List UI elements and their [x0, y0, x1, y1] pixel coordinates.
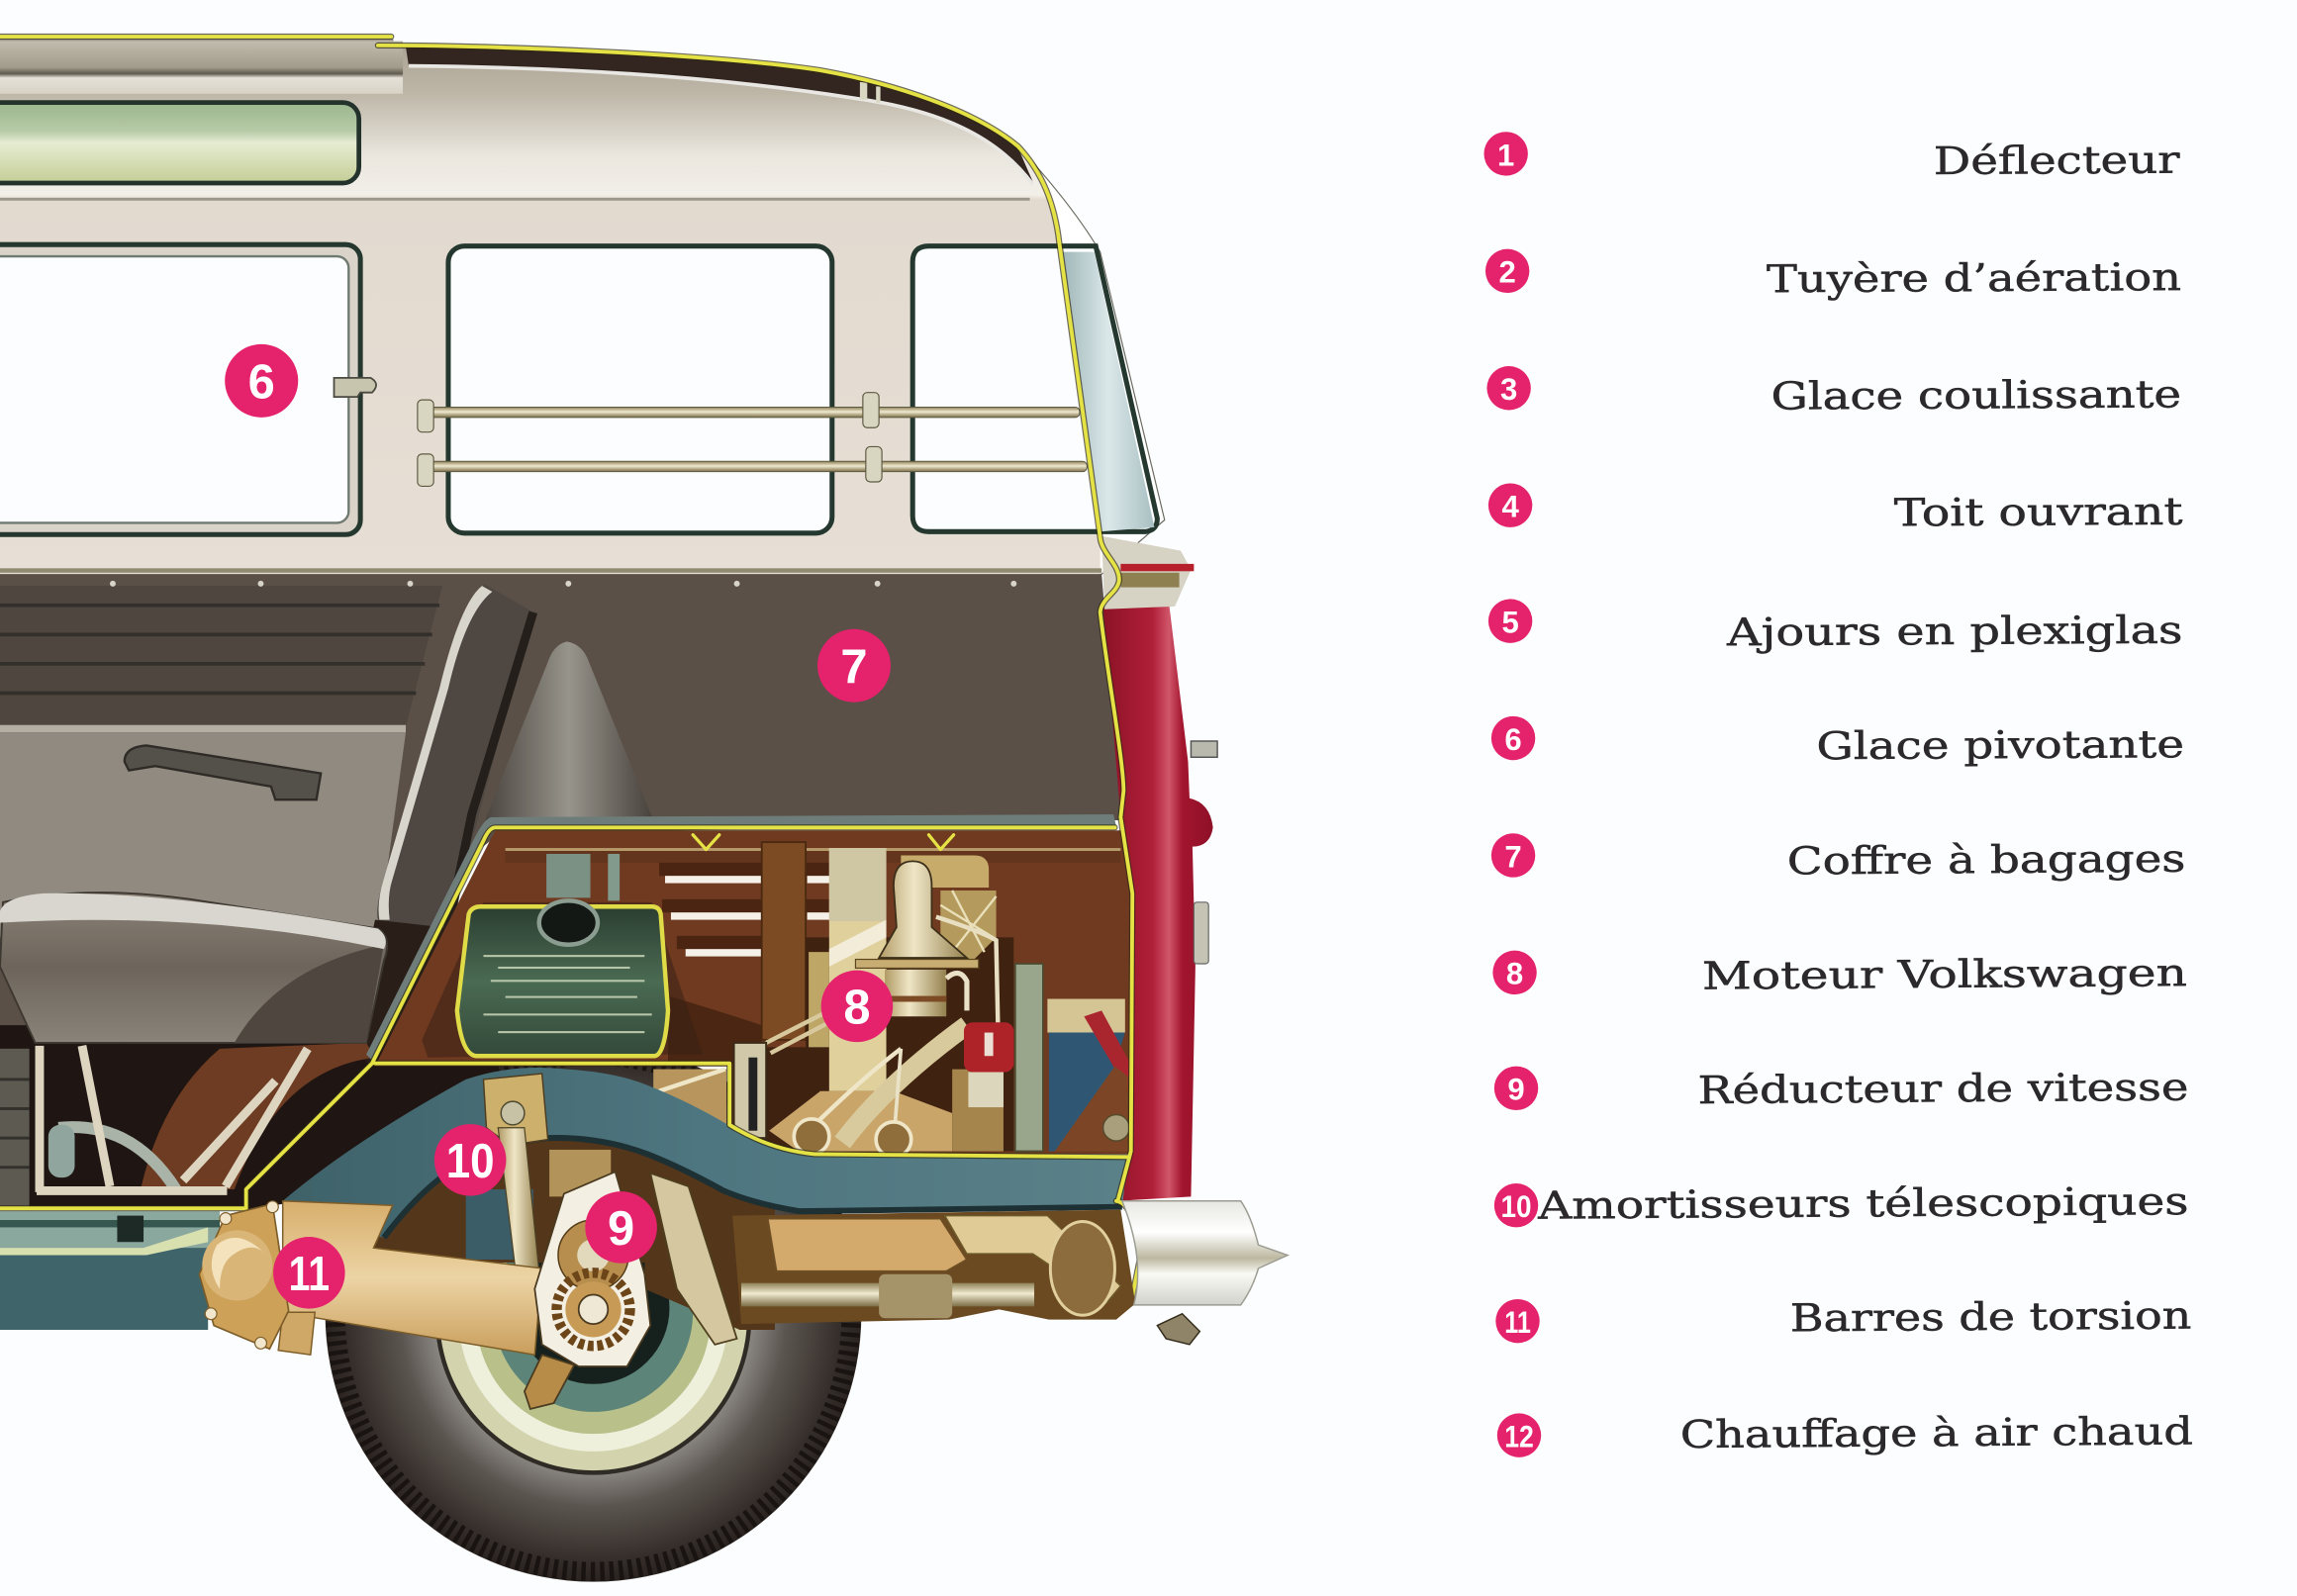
legend item 9 [1494, 1066, 2189, 1113]
legend item 5: Ajours en plexiglas [1726, 609, 2183, 655]
chassis frame, blue-green [0, 1068, 1128, 1330]
legend item 2: Tuyère d’aération [1767, 255, 2181, 302]
legend item 1: 1 [1497, 138, 1514, 172]
tank shadow [668, 996, 762, 1064]
legend item 6: Glace pivotante [1816, 722, 2184, 769]
left sill [0, 1247, 208, 1330]
legend item 5 [1488, 599, 2183, 655]
legend item 6 [1491, 716, 2184, 769]
battery block [1047, 999, 1129, 1151]
front side window [912, 246, 1157, 531]
legend item 9: 9 [1507, 1073, 1525, 1107]
fuel tank filler pipe [546, 854, 591, 897]
badge 7: 7 [840, 641, 868, 695]
legend item 7: 7 [1504, 839, 1522, 874]
rear axle, gearbox and exhaust [650, 1174, 1135, 1345]
ignition coil [964, 1022, 1013, 1107]
skylight [0, 103, 359, 183]
legend item 10: 10 [1500, 1189, 1532, 1224]
legend item 3: Glace coulissante [1771, 373, 2181, 420]
heater pipe [58, 1127, 176, 1189]
dark engine bay [740, 937, 1013, 1151]
wind screen wedge [1062, 252, 1154, 531]
legend item 5: 5 [1501, 605, 1519, 639]
legend item 11: 11 [1504, 1305, 1531, 1340]
reduction gears [525, 1172, 650, 1409]
legend item 7 [1491, 833, 2186, 885]
engine compartment [366, 814, 1132, 1157]
badge 8: 8 [843, 982, 871, 1035]
legend item 12 [1497, 1410, 2193, 1457]
badge 7 [817, 629, 891, 703]
roof dark strip [406, 47, 1033, 182]
legend item 8: Moteur Volkswagen [1702, 951, 2187, 999]
red front panel [1103, 604, 1213, 1201]
badge 10: 10 [446, 1135, 495, 1188]
legend item 3: 3 [1500, 372, 1517, 407]
legend item 12: 12 [1504, 1419, 1534, 1454]
legend item 12: Chauffage à air chaud [1680, 1410, 2193, 1457]
oil pan [768, 1219, 967, 1271]
coil spring block [549, 1150, 611, 1196]
seat legs [37, 1046, 308, 1192]
door handle [125, 745, 321, 799]
brown fender [141, 1043, 375, 1189]
rivets [110, 581, 1016, 587]
brown column [762, 842, 806, 1040]
legend item 9: Réducteur de vitesse [1697, 1066, 2189, 1113]
pivoting window [0, 244, 360, 534]
torsion end cap [199, 1201, 289, 1349]
door trim [0, 725, 406, 732]
damper tube [498, 1128, 539, 1271]
badge 11: 11 [289, 1248, 330, 1301]
legend item 1: Déflecteur [1934, 139, 2180, 184]
torsion bar arm [199, 1201, 542, 1355]
ribbed door panel [0, 586, 442, 726]
protection bars [418, 393, 1087, 486]
window latch [334, 378, 376, 397]
seat back [377, 585, 533, 931]
front seat [0, 892, 387, 1043]
legend item 8 [1492, 951, 2187, 999]
legend list [1483, 132, 2193, 1457]
legend item 3 [1486, 366, 2181, 420]
engine block and lines [653, 1010, 1004, 1157]
roof crease [0, 198, 1030, 201]
legend item 4: 4 [1501, 490, 1519, 524]
air slats [659, 863, 830, 957]
engine fan housing [809, 848, 887, 1091]
legend item 1 [1483, 132, 2180, 184]
badge 8 [821, 971, 893, 1042]
front bumper [1122, 1201, 1288, 1345]
middle sliding window [448, 246, 832, 533]
pulley and belt [1015, 964, 1043, 1151]
legend item 8: 8 [1506, 957, 1523, 991]
legend item 6: 6 [1504, 722, 1522, 757]
shock absorber and torsion housing [466, 1074, 611, 1271]
fuel tank [422, 900, 704, 1058]
yellow cut-away line [0, 37, 1140, 1303]
legend item 4: Toit ouvrant [1894, 490, 2183, 535]
gear housing wall [483, 1074, 548, 1146]
undercarriage backing [366, 1133, 775, 1330]
legend item 4 [1488, 483, 2183, 535]
roof rack strip [0, 41, 403, 94]
floor and wheel arch [0, 920, 498, 1210]
badge 9: 9 [608, 1202, 634, 1256]
badge 10 [434, 1124, 506, 1196]
legend item 2: 2 [1499, 255, 1516, 290]
rear bracket [945, 1216, 1120, 1303]
front lamps and side hardware [1101, 536, 1217, 964]
spare wheel cone [485, 641, 653, 820]
air filter [855, 855, 1001, 1148]
badge 6: 6 [248, 356, 275, 410]
legend item 7: Coffre à bagages [1787, 837, 2186, 885]
van upper body [0, 40, 1165, 574]
legend item 2 [1485, 249, 2181, 302]
legend item 11 [1495, 1294, 2191, 1343]
badge 6 [225, 344, 298, 418]
axle tube [741, 1283, 1034, 1306]
badge 11 [273, 1237, 345, 1309]
legend item 11: Barres de torsion [1790, 1294, 2191, 1341]
lower body brown panel [0, 574, 1122, 1055]
legend item 10: Amortisseurs télescopiques [1537, 1179, 2189, 1229]
rear wheel [326, 1046, 861, 1582]
leaf strut [650, 1174, 737, 1345]
badge 9 [585, 1191, 657, 1264]
